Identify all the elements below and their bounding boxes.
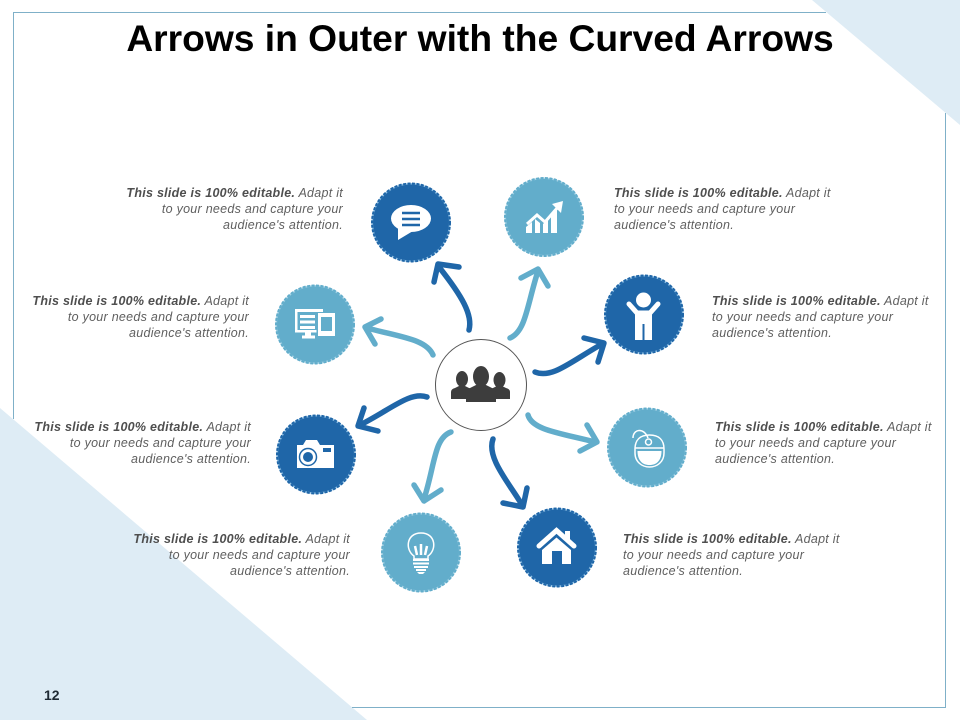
text block: chat: to your needs and capture your <box>162 202 343 216</box>
text block: person: audience's attention. <box>712 326 832 340</box>
text block: light bulb: This slide is 100% editable. Adapt it <box>133 532 350 546</box>
text block: growth chart: to your needs and capture your <box>614 202 795 216</box>
arrow: to bulb <box>414 432 451 501</box>
text block: growth chart: This slide is 100% editable. Adapt it <box>614 186 831 200</box>
text block: person: to your needs and capture your <box>712 310 893 324</box>
arrow: to home <box>492 439 527 507</box>
text block: mouse <box>715 420 932 466</box>
text block: person: This slide is 100% editable. Adapt it <box>712 294 929 308</box>
title: Arrows in Outer with the Curved Arrows <box>126 17 834 59</box>
text block: mouse: to your needs and capture your <box>715 436 896 450</box>
text block: mouse: This slide is 100% editable. Adapt it <box>715 420 932 434</box>
node: camera icon <box>276 415 356 494</box>
text block: growth chart: audience's attention. <box>614 218 734 232</box>
node: person icon <box>604 275 684 354</box>
text block: devices: audience's attention. <box>129 326 249 340</box>
text block: home: This slide is 100% editable. Adapt it <box>623 532 840 546</box>
text block: devices <box>32 294 250 340</box>
node: chat icon <box>372 183 450 262</box>
center circle with people icon <box>436 340 526 430</box>
text block: light bulb: audience's attention. <box>230 564 350 578</box>
arrow: to person <box>535 338 604 374</box>
text block: devices: This slide is 100% editable. Adapt it <box>32 294 249 308</box>
text block: camera: to your needs and capture your <box>70 436 251 450</box>
page number: 12 <box>44 687 60 703</box>
text block: home: to your needs and capture your <box>623 548 804 562</box>
node: devices icon <box>276 285 354 364</box>
text block: camera: audience's attention. <box>131 452 251 466</box>
arrow: to camera <box>358 396 427 431</box>
arrow: to growth chart <box>510 269 548 338</box>
corner triangle: top right <box>812 0 960 125</box>
node: growth chart icon <box>504 178 584 256</box>
text block: growth chart <box>614 186 831 232</box>
text block: light bulb <box>133 532 350 578</box>
text block: camera <box>34 420 252 466</box>
node: light bulb icon <box>382 513 460 592</box>
arrow: to devices <box>365 319 433 355</box>
text block: camera: This slide is 100% editable. Adapt it <box>34 420 251 434</box>
text block: chat: This slide is 100% editable. Adapt it <box>126 186 343 200</box>
text block: mouse: audience's attention. <box>715 452 835 466</box>
arrow: to mouse <box>528 415 597 451</box>
node: home icon <box>518 508 596 587</box>
text block: chat <box>126 186 344 232</box>
text block: devices: to your needs and capture your <box>68 310 249 324</box>
text block: chat: audience's attention. <box>223 218 343 232</box>
text block: home: audience's attention. <box>623 564 743 578</box>
text block: light bulb: to your needs and capture your <box>169 548 350 562</box>
arrow: to chat <box>434 264 470 330</box>
corner triangle: bottom left <box>0 408 367 720</box>
text block: home <box>623 532 840 578</box>
text block: person <box>712 294 929 340</box>
node: mouse icon <box>608 408 686 487</box>
